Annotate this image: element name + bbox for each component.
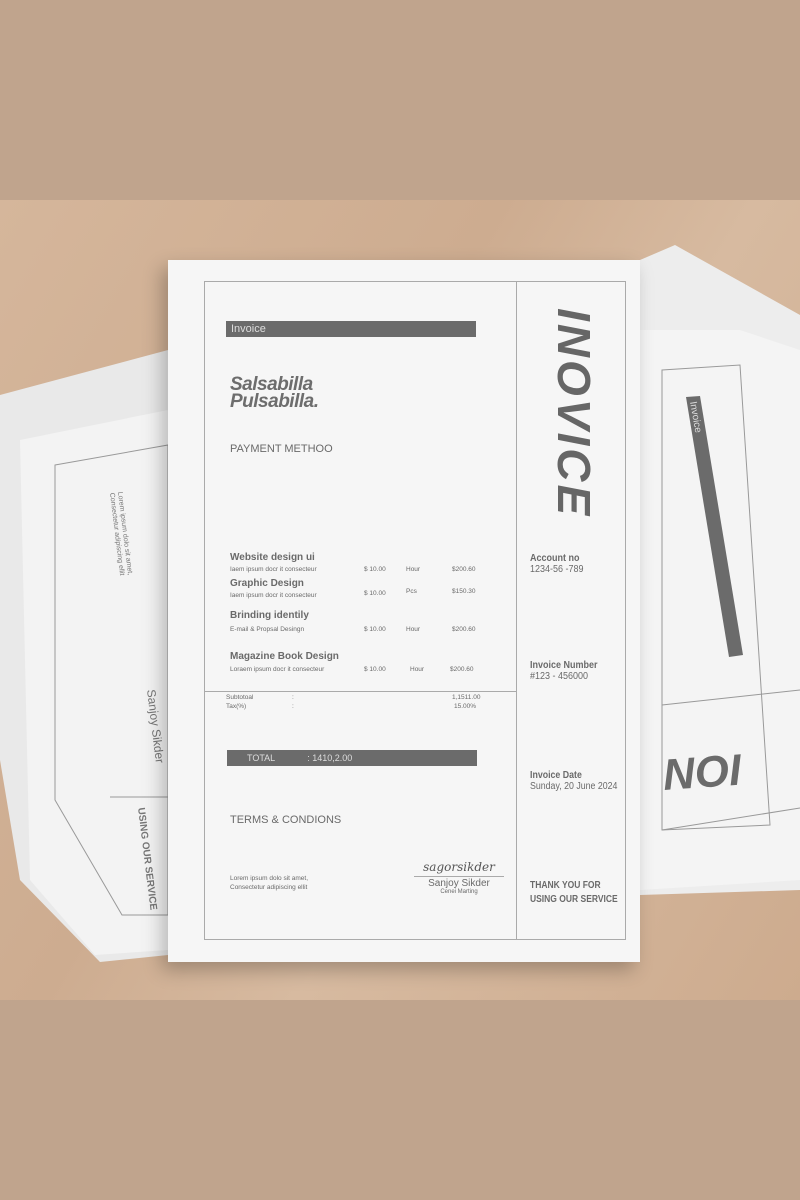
thank you: THANK YOU FOR [530,880,601,891]
account no: Account no [530,553,580,564]
payment method: PAYMENT METHOO [230,443,333,455]
items list: $200.60 [452,566,476,573]
invoice number: Invoice Number [530,660,598,671]
items list: Loraem ipsum docr it consecteur [230,666,324,673]
invoice number: #123 - 456000 [530,671,588,682]
invoice number [530,660,598,682]
items list: $200.60 [450,666,474,673]
paper stack left [0,350,168,962]
signature: Sanjoy Sikder [428,878,490,889]
paper stack right [640,245,800,895]
items list: $ 10.00 [364,626,386,633]
account no [530,553,584,575]
items list: E-mail & Propsal Desingn [230,626,304,633]
subtotal: : [292,694,294,701]
items list [230,552,476,673]
subtotal: 1,1511.00 [452,694,480,701]
lorem text: Consectetur adipiscing ellit [230,884,307,891]
thank you [530,880,618,905]
subtotal: Subtotoal [226,694,253,701]
left paper text [108,491,167,911]
items list: Hour [406,566,420,573]
inner frame [204,281,626,940]
items list: $150.30 [452,588,476,595]
invoice date: Invoice Date [530,770,582,781]
subtotal: 15.00% [454,703,476,710]
subtotal: : [292,703,294,710]
invoice header bar: Invoice [231,323,266,335]
items list: Graphic Design [230,578,304,589]
left paper text: Consectetur adipiscing ellit [108,492,125,576]
main invoice paper [168,260,640,962]
lorem text [230,875,308,891]
lorem text: Lorem ipsum dolo sit amet, [230,875,308,882]
left paper text: Sanjoy Sikder [144,689,167,764]
paper stack right: NOI [661,746,744,800]
items list: Hour [410,666,424,673]
thank you: USING OUR SERVICE [530,894,618,905]
invoice header bar [226,321,476,337]
items list: $200.60 [452,626,476,633]
items list: Iaem ipsum docr it consecteur [230,566,317,573]
items list: Hour [406,626,420,633]
big vertical INOVICE: INOVICE [548,308,600,518]
items list: $ 10.00 [364,666,386,673]
wood background [0,200,800,1000]
subtotal [226,694,480,710]
terms: TERMS & CONDIONS [230,814,341,826]
items list: $ 10.00 [364,590,386,597]
subtotal: Tax(%) [226,703,246,710]
items list: Iaem ipsum docr it consecteur [230,592,317,599]
total bar [227,750,477,766]
company name [230,374,318,412]
items list: $ 10.00 [364,566,386,573]
paper stack right: Invoice [687,401,703,434]
items list: Pcs [406,588,417,595]
items list: Brinding identily [230,610,309,621]
invoice date [530,770,618,792]
company name: Salsabilla [230,374,313,395]
invoice date: Sunday, 20 June 2024 [530,781,617,792]
left paper text: USING OUR SERVICE [135,807,159,911]
items list: Magazine Book Design [230,651,339,662]
total bar: TOTAL : 1410,2.00 [247,753,352,763]
account no: 1234-56 -789 [530,564,584,575]
company name: Pulsabilla. [230,391,318,412]
left paper text: Lorem ipsum dolo sit amet, [116,491,133,576]
signature: Cenei Marting [440,889,478,895]
signature [414,860,504,895]
items list: Website design ui [230,552,315,563]
signature: sagorsikder [423,860,495,874]
